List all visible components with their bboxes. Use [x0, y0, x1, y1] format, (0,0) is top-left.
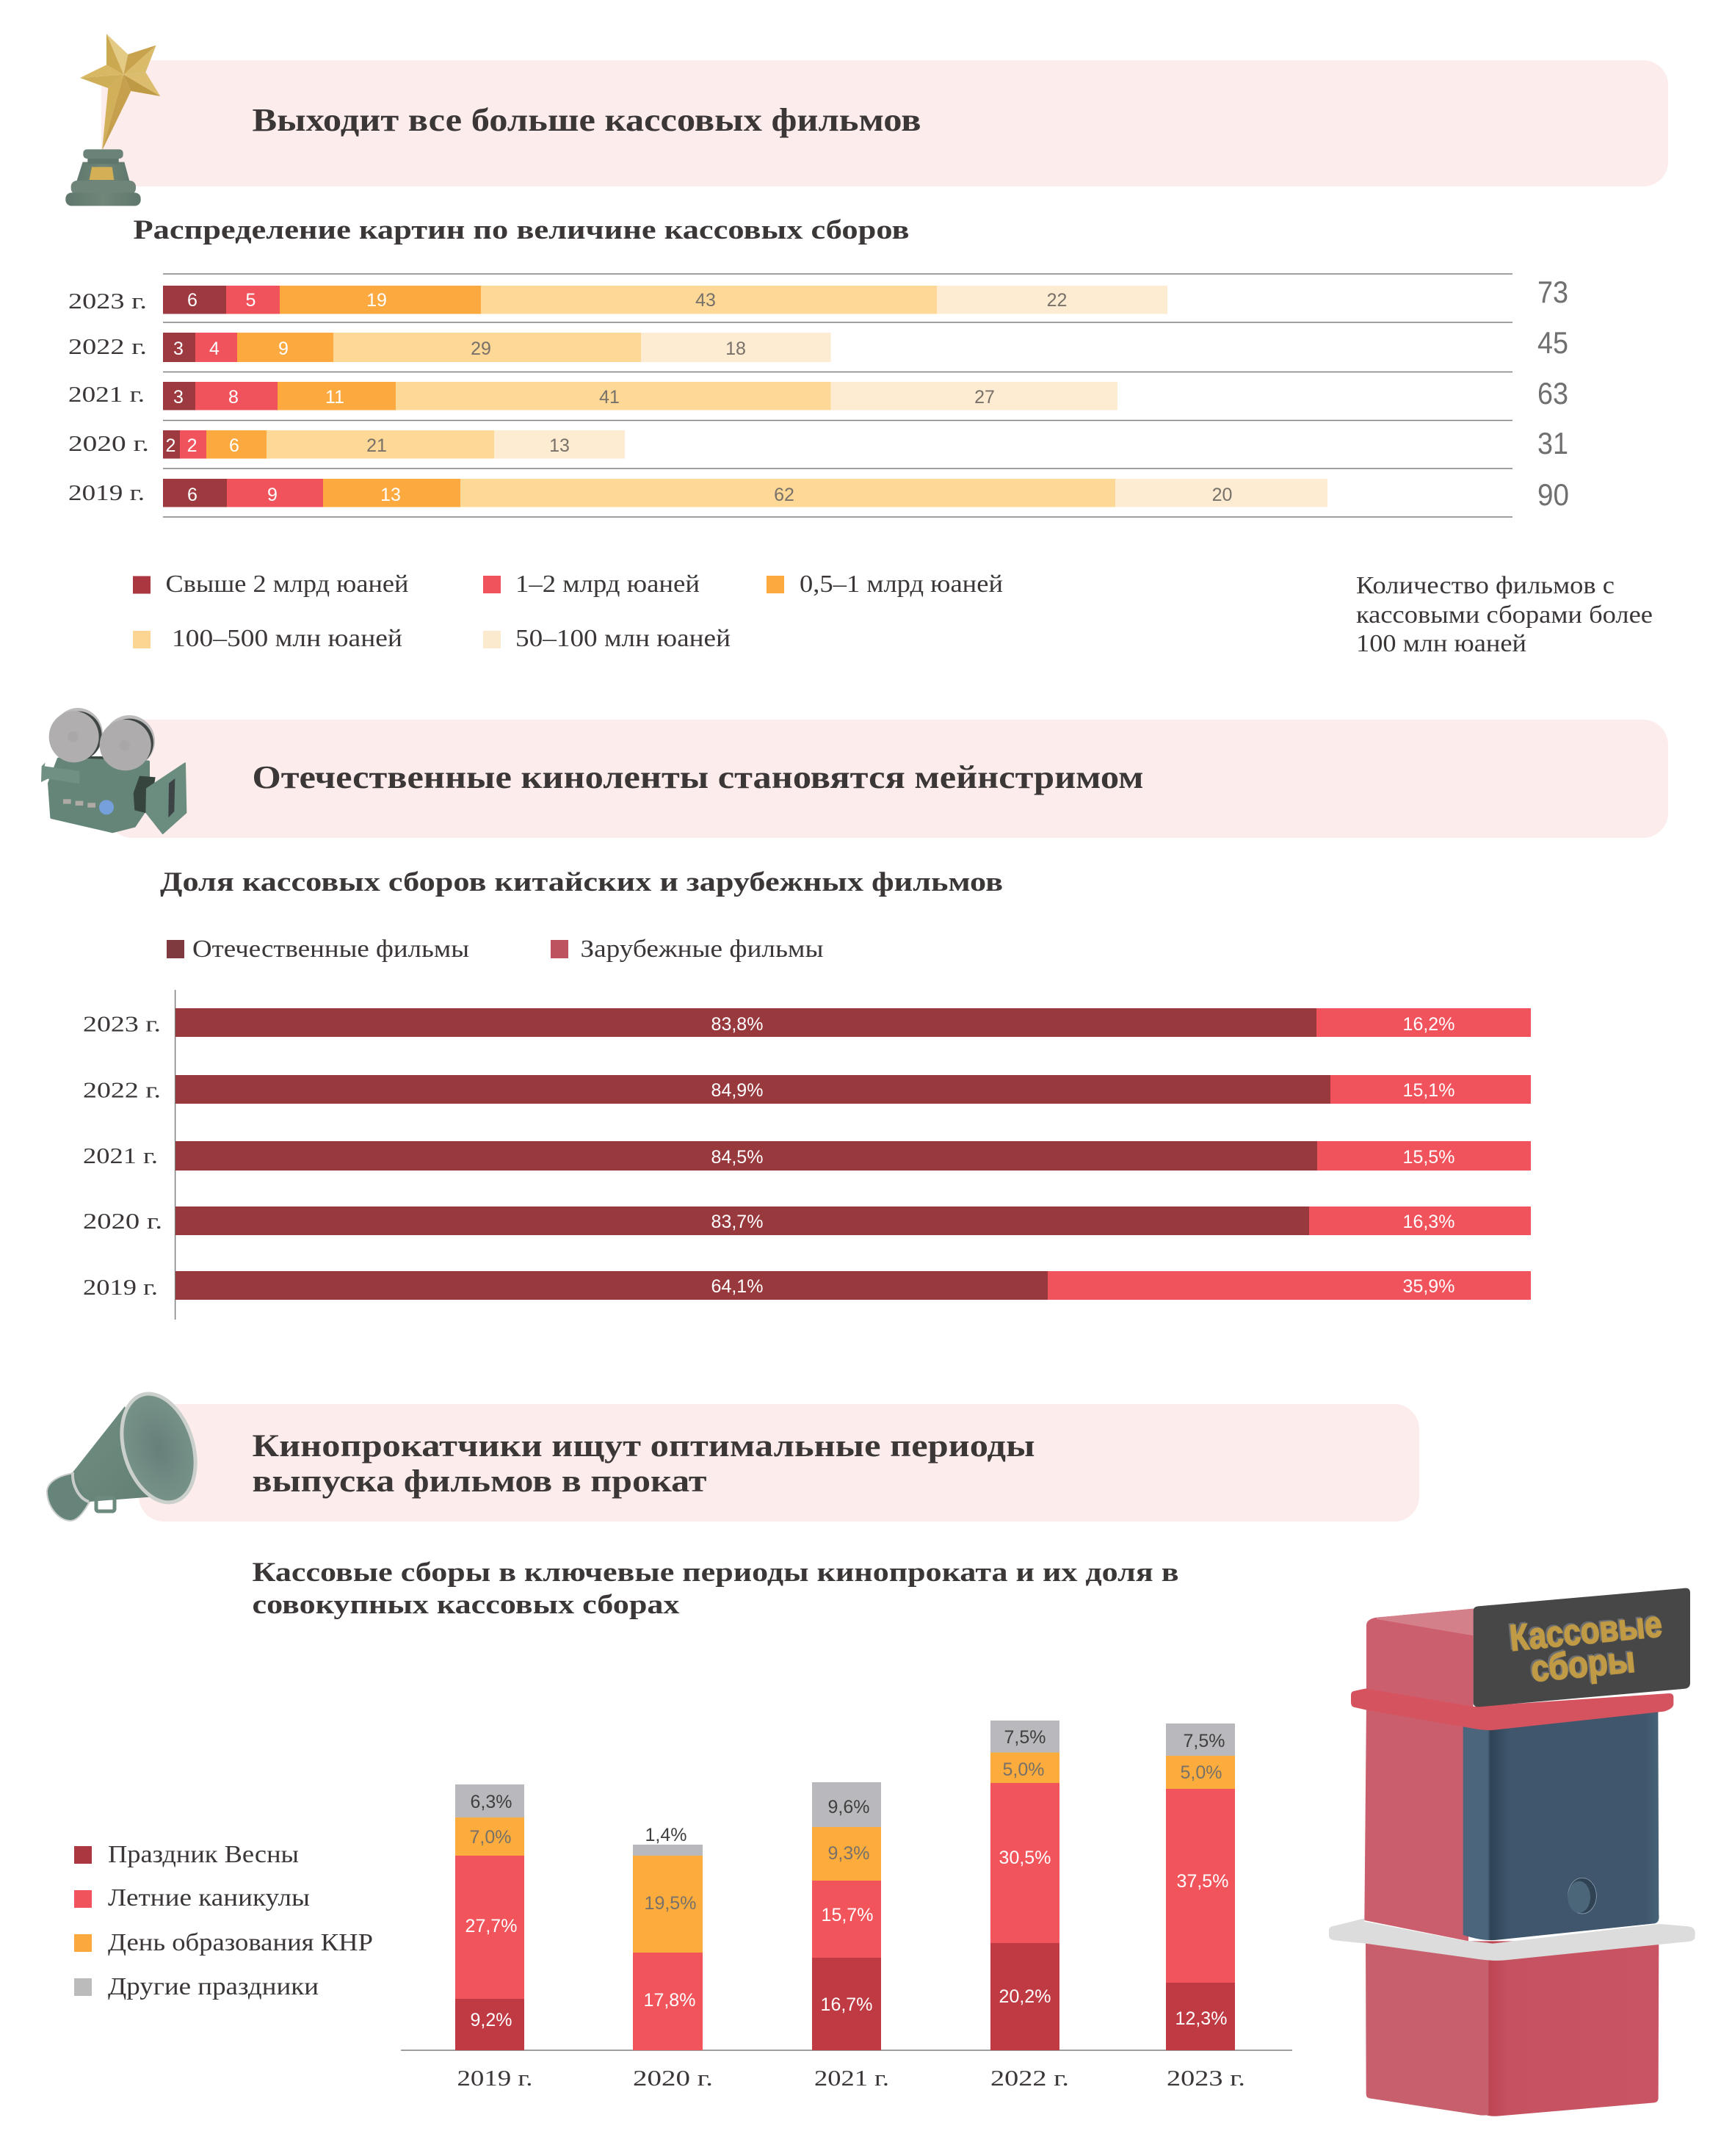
bar: 2023: [83, 1008, 1531, 1037]
column: 2019: 6,3%: [471, 1792, 512, 1812]
column: 2020: [633, 1825, 713, 2091]
row: 2023: 43: [695, 290, 716, 311]
note: totals explanation: кассовыми сборами более: [1356, 601, 1653, 629]
column: 2022: 5,0%: [1003, 1759, 1044, 1780]
banner background 1: [101, 60, 1668, 187]
bar: 2023: 2023 г.: [83, 1010, 161, 1037]
totals column: [1537, 275, 1569, 512]
legend: domestic and foreign: Отечественные фильмы: [192, 936, 469, 963]
heading: section 3: Кинопрокатчики ищут оптимальные периоды: [253, 1429, 1035, 1464]
column: 2021: 9,6%: [828, 1797, 869, 1817]
column: 2021: 2021 г.: [814, 2065, 889, 2091]
column: 2022: 20,2%: [999, 1986, 1051, 2007]
column: 2019: 27,7%: [465, 1916, 517, 1936]
legend: release periods: [74, 1841, 373, 2000]
panel: section 2, domestic vs foreign: [41, 708, 1668, 1320]
bar: 2020: 2020 г.: [83, 1208, 162, 1234]
bar: 2019: [83, 1271, 1531, 1300]
row: 2020: 2020 г.: [68, 430, 149, 456]
panel: section 3, release periods: [47, 1385, 1695, 2116]
legend: box office size: 50–100 млн юаней: [515, 625, 731, 652]
legend: release periods: Другие праздники: [108, 1973, 319, 2000]
column: 2020: 17,8%: [644, 1990, 695, 2011]
row: 2020: 2: [187, 435, 198, 456]
row: 2021: 27: [974, 387, 995, 408]
row: 2023: 19: [366, 290, 387, 311]
column: 2020: 19,5%: [645, 1893, 696, 1914]
column: 2022: [990, 1721, 1069, 2091]
totals column: 73: [1537, 275, 1568, 309]
bar: 2020: 83,7%: [711, 1212, 763, 1232]
heading: section 3: выпуска фильмов в прокат: [253, 1464, 706, 1499]
bar: 2022: [83, 1075, 1531, 1104]
column: 2020: 1,4%: [645, 1825, 686, 1845]
column: 2019: 9,2%: [471, 2010, 512, 2030]
legend: release periods: День образования КНР: [108, 1929, 373, 1956]
row: 2021: 3: [173, 387, 184, 408]
note: totals explanation: 100 млн юаней: [1356, 630, 1526, 657]
heading: section 3: [253, 1429, 1035, 1499]
legend: domestic and foreign: [167, 936, 824, 963]
heading: section 1: Выходит все больше кассовых фильмов: [253, 102, 921, 138]
row: 2022: [68, 333, 831, 362]
row: 2023: 2023 г.: [68, 288, 147, 314]
column: 2023: 2023 г.: [1167, 2065, 1245, 2091]
panel: section 1, box office distribution: [65, 34, 1668, 657]
row: 2019: 62: [774, 485, 794, 505]
row: 2020: 6: [229, 435, 239, 456]
note: totals explanation: Количество фильмов с: [1356, 572, 1615, 599]
row: 2022: 29: [471, 339, 491, 359]
bar: 2021: 2021 г.: [83, 1143, 158, 1168]
legend: box office size: 100–500 млн юаней: [172, 625, 402, 652]
subheading: periods chart: Кассовые сборы в ключевые периоды кинопроката и их доля в: [253, 1558, 1179, 1588]
row: 2019: 13: [380, 485, 401, 505]
column: 2021: [812, 1782, 889, 2091]
bar: 2022: 15,1%: [1403, 1080, 1454, 1101]
note: totals explanation: [1356, 572, 1653, 657]
row: 2022: 9: [278, 339, 289, 359]
column: 2023: 37,5%: [1177, 1871, 1228, 1892]
kiosk sign text: [1508, 1603, 1664, 1690]
column: 2019: 7,0%: [470, 1827, 511, 1848]
totals column: 63: [1537, 376, 1568, 410]
row: 2021: 2021 г.: [68, 381, 145, 407]
chart: stacked columns by period: [401, 1721, 1292, 2091]
kiosk sign text: Кассовые: [1508, 1603, 1664, 1659]
kiosk sign text: сборы: [1529, 1639, 1637, 1690]
legend: domestic and foreign: Зарубежные фильмы: [580, 936, 824, 963]
bar: 2021: [83, 1141, 1531, 1171]
totals column: 31: [1537, 426, 1568, 460]
column: 2023: [1166, 1723, 1245, 2091]
row: 2019: 9: [267, 485, 278, 505]
column: 2020: 2020 г.: [633, 2065, 713, 2091]
legend: release periods: Летние каникулы: [108, 1884, 310, 1911]
bar: 2021: 84,5%: [711, 1147, 763, 1168]
bar: 2021: 15,5%: [1403, 1147, 1454, 1168]
column: 2023: 12,3%: [1175, 2008, 1227, 2029]
subheading: periods chart: совокупных кассовых сборах: [253, 1590, 680, 1620]
legend: box office size: [133, 571, 1003, 652]
subheading: distribution chart: Распределение картин по величине кассовых сборов: [134, 215, 909, 245]
subheading: periods chart: [253, 1558, 1179, 1620]
bar: 2020: [83, 1207, 1531, 1235]
row: 2019: 2019 г.: [68, 480, 145, 505]
bar: 2022: 84,9%: [711, 1080, 763, 1101]
column: 2022: 30,5%: [999, 1848, 1051, 1868]
row: 2022: 18: [725, 339, 746, 359]
bar: 2019: 35,9%: [1403, 1276, 1454, 1297]
row: 2021: 8: [228, 387, 239, 408]
banner background 3: [139, 1404, 1419, 1522]
column: 2022: 2022 г.: [990, 2065, 1069, 2091]
row: 2022: 4: [209, 339, 220, 359]
heading: section 2: Отечественные киноленты становятся мейнстримом: [253, 759, 1144, 795]
totals column: 45: [1537, 325, 1568, 360]
legend: box office size: Свыше 2 млрд юаней: [166, 571, 408, 598]
row: 2022: 2022 г.: [68, 333, 147, 359]
row: 2019: 6: [187, 485, 198, 505]
bar: 2023: 16,2%: [1403, 1014, 1454, 1035]
icon: gold star trophy: [65, 34, 160, 206]
row: 2023: 6: [187, 290, 198, 311]
column: 2023: 5,0%: [1181, 1762, 1222, 1783]
column: 2022: 7,5%: [1004, 1727, 1046, 1748]
row: 2020: 2: [166, 435, 175, 456]
icon: megaphone: [47, 1385, 208, 1521]
column: 2021: 9,3%: [828, 1843, 869, 1864]
row: 2020: [68, 430, 625, 458]
legend: box office size: 0,5–1 млрд юаней: [800, 571, 1003, 598]
totals column: 90: [1537, 477, 1569, 512]
chart: domestic vs foreign share: [83, 990, 1531, 1320]
illustration: box office kiosk: [1329, 1588, 1695, 2116]
row: 2023: 22: [1047, 290, 1067, 311]
icon: film camera: [41, 708, 186, 833]
chart: films by box office size: [68, 274, 1569, 517]
column: 2021: 16,7%: [821, 1994, 872, 2015]
row: 2022: 3: [173, 339, 184, 359]
bar: 2019: 2019 г.: [83, 1274, 158, 1300]
banner background 2: [107, 720, 1668, 838]
legend: box office size: 1–2 млрд юаней: [515, 571, 700, 598]
legend: release periods: Праздник Весны: [108, 1841, 299, 1868]
bar: 2022: 2022 г.: [83, 1077, 161, 1103]
column: 2019: 2019 г.: [457, 2065, 533, 2091]
subheading: share chart: Доля кассовых сборов китайских и зарубежных фильмов: [160, 867, 1003, 897]
row: 2021: 41: [599, 387, 620, 408]
column: 2023: 7,5%: [1184, 1731, 1225, 1751]
row: 2019: 20: [1212, 485, 1232, 505]
bar: 2020: 16,3%: [1403, 1212, 1454, 1232]
row: 2020: 13: [549, 435, 570, 456]
row: 2019: [68, 479, 1327, 507]
column: 2021: 15,7%: [822, 1905, 873, 1925]
row: 2021: [68, 381, 1117, 410]
column: 2019: [455, 1784, 533, 2091]
bar: 2023: 83,8%: [711, 1014, 763, 1035]
row: 2023: [68, 286, 1167, 314]
row: 2020: 21: [366, 435, 387, 456]
row: 2021: 11: [325, 387, 344, 408]
bar: 2019: 64,1%: [711, 1276, 763, 1297]
row: 2023: 5: [246, 290, 256, 311]
